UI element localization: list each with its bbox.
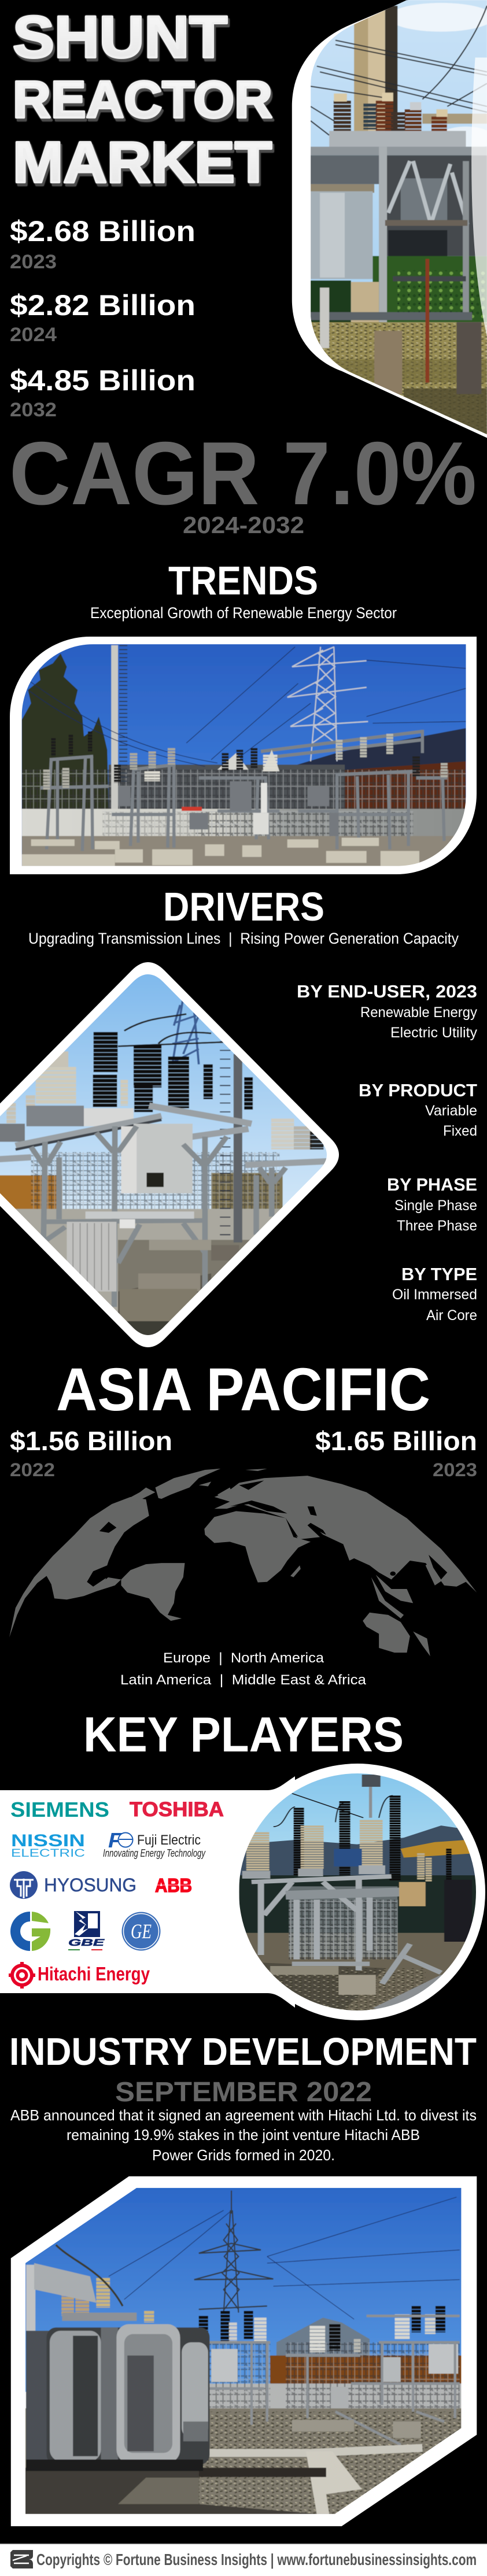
- regional value 2023: [315, 1426, 477, 1480]
- hero photo frame: [292, 0, 487, 438]
- regional value 2022: [10, 1426, 172, 1480]
- CAGR: 2024-2032: [183, 512, 304, 538]
- trends photo: switchyard: [19, 642, 469, 867]
- segment: by product: BY PRODUCT: [359, 1080, 477, 1100]
- logo: gbe: [68, 1911, 105, 1950]
- logo: siemens: SIEMENS: [10, 1798, 109, 1821]
- segment: by product: [359, 1080, 477, 1139]
- logo: hyosung: [10, 1871, 136, 1899]
- segment: by phase: Single Phase: [394, 1198, 477, 1214]
- diamond photo: equipment: [0, 974, 327, 1335]
- heading: drivers: Upgrading Transmission Lines | Rising Power Generation Capacity: [28, 930, 459, 947]
- stat: 2023 value: $2.68 Billion: [10, 215, 195, 247]
- other regions: Europe | North America: [163, 1650, 324, 1666]
- stat: 2024 value: [10, 289, 195, 346]
- segment: by phase: Three Phase: [397, 1218, 477, 1234]
- logo: nissin electric: ELECTRIC: [11, 1847, 85, 1860]
- segment: by phase: BY PHASE: [387, 1174, 477, 1195]
- heading: key players: KEY PLAYERS: [83, 1708, 404, 1762]
- regional value 2022: 2022: [10, 1459, 55, 1480]
- regional value 2022: $1.56 Billion: [10, 1426, 172, 1456]
- segment: by type: Oil Immersed: [392, 1287, 477, 1303]
- segment: by end-user: BY END-USER, 2023: [297, 981, 477, 1001]
- logo: hitachi energy: Hitachi Energy: [38, 1963, 150, 1984]
- segment: by end-user: Electric Utility: [390, 1025, 477, 1041]
- segment: by product: Variable: [425, 1103, 477, 1119]
- segment: by type: BY TYPE: [401, 1264, 477, 1284]
- segment: by phase: [387, 1174, 477, 1234]
- development text: ABB announced that it signed an agreement with Hitachi Ltd. to divest its: [10, 2106, 477, 2124]
- regional value 2023: 2023: [433, 1459, 477, 1480]
- logo: hyosung: HYOSUNG: [44, 1875, 136, 1895]
- other regions: Latin America | Middle East & Africa: [120, 1672, 367, 1688]
- circular photo: reactor: [236, 1771, 478, 2012]
- segment: by end-user: Renewable Energy: [360, 1004, 477, 1021]
- heading: trends: TRENDS: [168, 558, 318, 603]
- title: MARKET: [13, 130, 272, 195]
- logo: ge: GE: [131, 1920, 152, 1943]
- logo: ge: [121, 1912, 161, 1951]
- stat: 2032 value: 2032: [10, 399, 57, 421]
- logo: nissin electric: [11, 1831, 85, 1860]
- heading: drivers: [28, 884, 459, 947]
- development date: SEPTEMBER 2022: [115, 2077, 372, 2108]
- stat: 2032 value: $4.85 Billion: [10, 364, 195, 397]
- development text: [10, 2106, 477, 2164]
- segment: by type: Air Core: [426, 1307, 477, 1324]
- logo: hitachi energy: [9, 1962, 150, 1989]
- title: REACTOR: [13, 71, 272, 129]
- segment: by end-user: [297, 981, 477, 1041]
- logo: cg: [10, 1912, 50, 1951]
- world map dome: [9, 1469, 477, 1656]
- logo: gbe: GBE: [68, 1937, 105, 1948]
- logo: fuji electric: Fuji Electric: [137, 1832, 201, 1848]
- logo: fuji electric: Innovating Energy Technology: [103, 1847, 206, 1859]
- bottom photo: transformer: [25, 2187, 463, 2516]
- stat: 2024 value: 2024: [10, 324, 57, 346]
- key players panel: [0, 1764, 485, 2020]
- logo: abb: ABB: [155, 1875, 192, 1896]
- other regions: [120, 1650, 367, 1688]
- regional value 2023: $1.65 Billion: [315, 1426, 477, 1456]
- logo: fuji electric: [103, 1828, 206, 1859]
- segment: by type: [392, 1264, 477, 1324]
- logo: toshiba: TOSHIBA: [130, 1798, 224, 1821]
- title: [13, 4, 272, 195]
- stat: 2023 value: [10, 215, 195, 273]
- diamond photo frame: [0, 962, 339, 1347]
- trends photo frame: [10, 637, 477, 874]
- bottom photo frame: [11, 2176, 477, 2526]
- stat: 2024 value: $2.82 Billion: [10, 289, 195, 321]
- heading: drivers: DRIVERS: [163, 884, 324, 929]
- heading: asia pacific: ASIA PACIFIC: [56, 1356, 430, 1424]
- heading: trends: [90, 558, 397, 622]
- heading: trends: Exceptional Growth of Renewable Energy Sector: [90, 604, 397, 622]
- logo: fuji electric: F: [108, 1828, 123, 1852]
- logo: nissin electric: NISSIN: [11, 1831, 85, 1850]
- development text: Power Grids formed in 2020.: [152, 2146, 335, 2164]
- segment: by product: Fixed: [443, 1123, 477, 1139]
- footer band: [0, 2544, 487, 2576]
- hero photo: substation: [311, 0, 487, 452]
- title: SHUNT: [13, 4, 227, 70]
- stat: 2032 value: [10, 364, 195, 421]
- stat: 2023 value: 2023: [10, 251, 57, 273]
- development text: remaining 19.9% stakes in the joint venture Hitachi ABB: [67, 2126, 420, 2143]
- footer logo: [10, 2550, 33, 2568]
